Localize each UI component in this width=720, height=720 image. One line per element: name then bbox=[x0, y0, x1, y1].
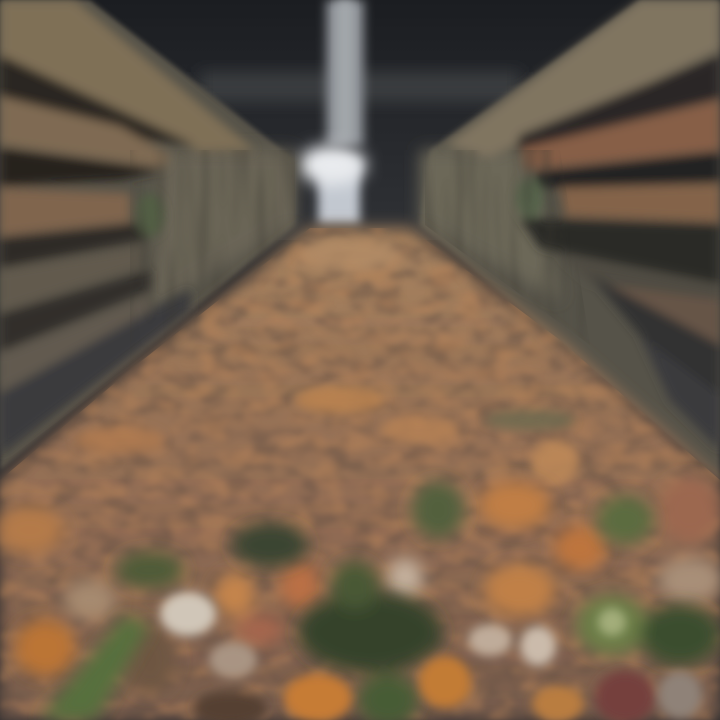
left shelving wall bbox=[0, 0, 295, 470]
floor speckle texture bbox=[0, 225, 720, 720]
ceiling bbox=[0, 0, 720, 240]
produce floor bbox=[0, 225, 720, 720]
left shelf bands bbox=[0, 0, 255, 455]
right shelf bands bbox=[445, 0, 720, 450]
right shelving wall bbox=[420, 0, 720, 480]
mid produce bbox=[0, 478, 720, 694]
foreground produce bbox=[160, 592, 702, 720]
green leafy vegetables bbox=[40, 482, 720, 720]
distant produce texture bbox=[75, 239, 579, 484]
vertical light column bbox=[298, 0, 366, 224]
shelf upright texture bbox=[130, 150, 552, 295]
